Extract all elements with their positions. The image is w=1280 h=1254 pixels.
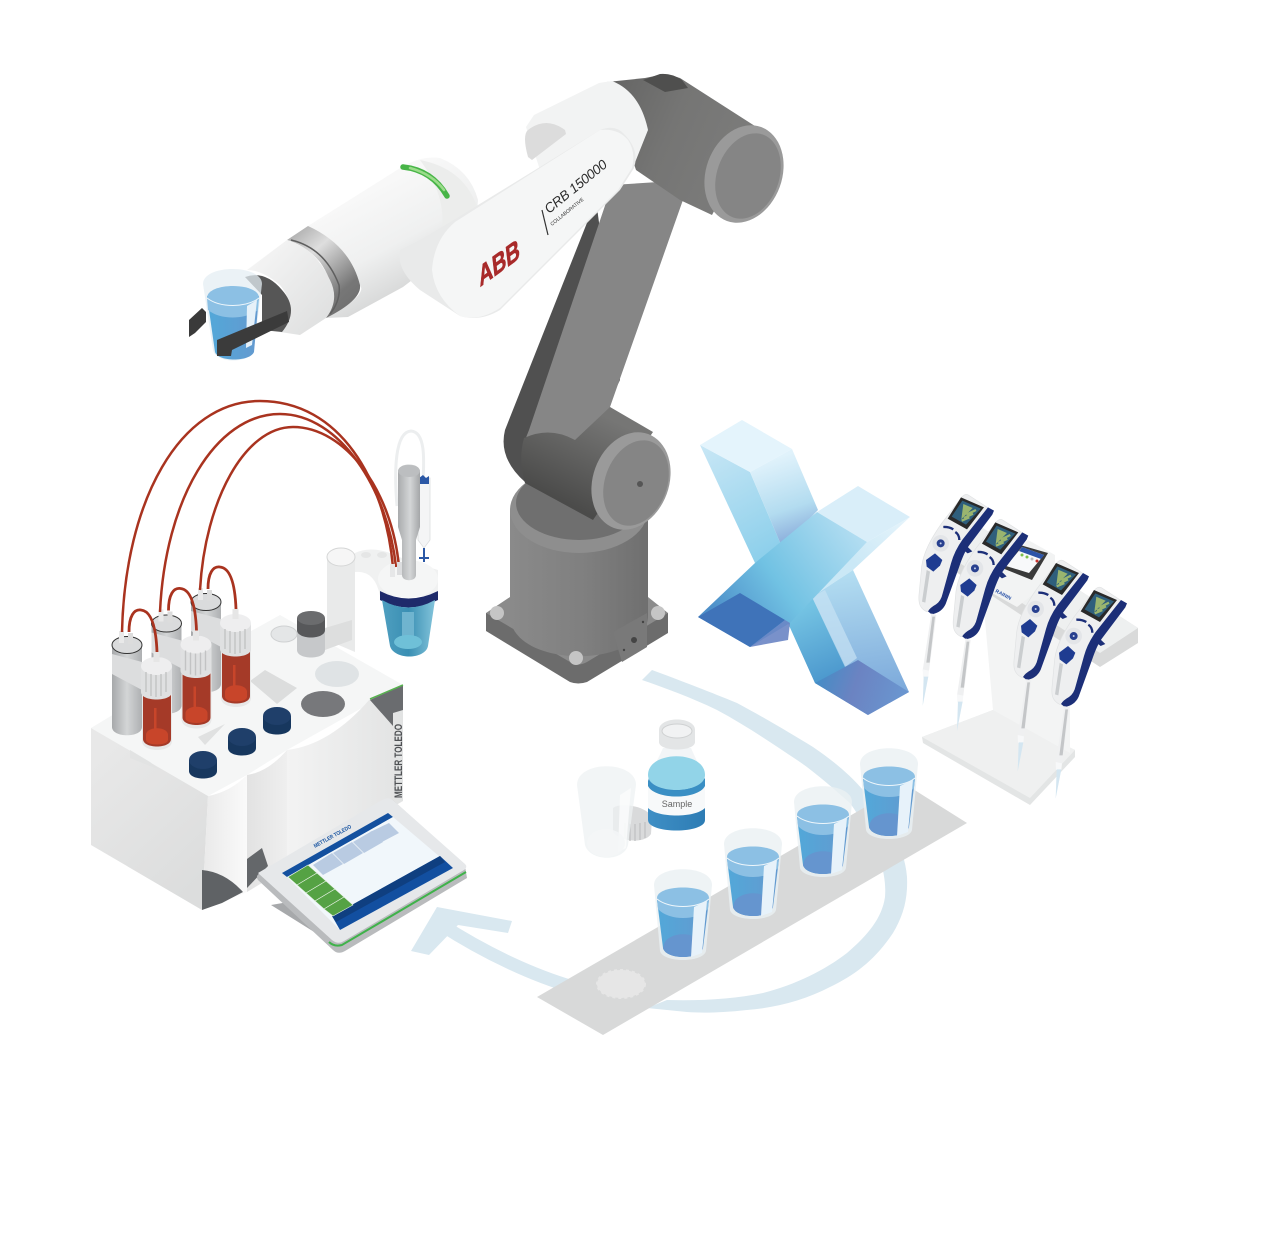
reagent bottle units <box>112 567 251 750</box>
electrode <box>396 431 430 580</box>
stand brand text: RAININ <box>994 588 1012 602</box>
gripper body <box>245 240 334 335</box>
conveyor belt <box>537 784 967 1035</box>
upper arm link <box>504 180 690 541</box>
navy caps <box>189 707 291 778</box>
sample bottle <box>648 720 705 830</box>
reagent tubing <box>122 401 399 632</box>
3D blue X logo <box>698 420 910 715</box>
top discs and jar <box>271 626 359 717</box>
terminal blue tiles <box>313 823 399 875</box>
empty beaker with cap <box>577 766 652 858</box>
gripper front finger <box>217 311 289 356</box>
pipette stand <box>922 527 1138 805</box>
instrument housing <box>91 615 405 910</box>
pipettes <box>919 495 1127 799</box>
terminal brand text: METTLER TOLEDO <box>313 824 353 850</box>
electrode stand <box>318 548 438 652</box>
metallic wrist ring <box>287 226 360 318</box>
model subtitle: COLLABORATIVE <box>549 196 586 228</box>
titration vessel <box>382 600 435 656</box>
vertical brand text: METTLER TOLEDO <box>393 724 405 798</box>
circular workflow arrow <box>411 670 907 1013</box>
dark lid jar <box>297 611 325 658</box>
robot arm <box>189 74 797 684</box>
elbow joint <box>607 74 797 234</box>
ABB logo: ABB <box>477 233 521 293</box>
touch terminal <box>257 798 467 953</box>
robot base <box>486 466 668 684</box>
sample cups on belt <box>654 748 918 960</box>
gripper back finger <box>189 308 206 337</box>
terminal green menu <box>288 865 353 916</box>
held beaker <box>203 269 262 360</box>
titrator unit <box>91 401 438 910</box>
wrist cylinder with status light <box>308 158 478 318</box>
white forearm link <box>399 81 648 318</box>
belt gear mark <box>597 970 645 998</box>
model name: CRB 150000 <box>541 157 610 216</box>
electrode holder tubes <box>390 562 402 577</box>
bottle label text: Sample <box>662 799 692 809</box>
